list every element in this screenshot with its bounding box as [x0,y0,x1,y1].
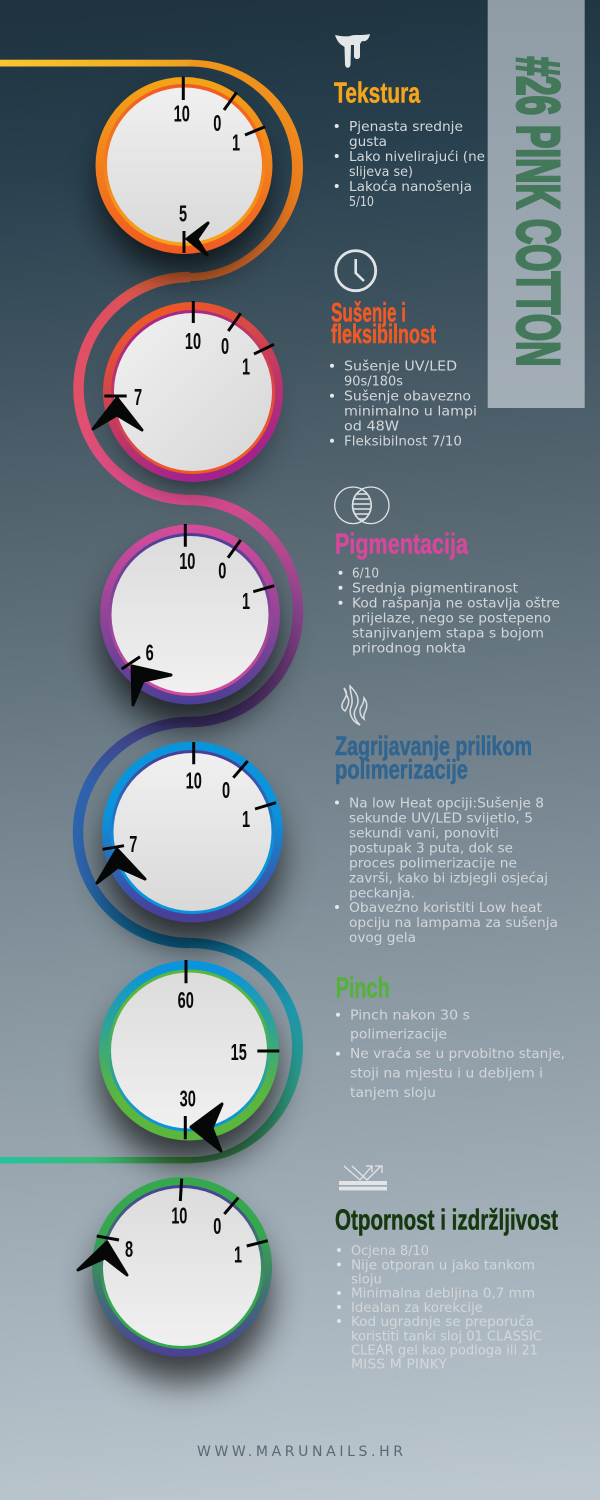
list: prijelaze, nego se postepeno [352,611,551,626]
list: minimalno u lampi [344,405,477,420]
dial 3: pigmentacija 6: 0 [218,558,226,585]
dial 3: pigmentacija 6 [100,524,280,705]
dial 5: pinch 30 [99,960,279,1151]
list: od 48W [344,420,399,435]
list [335,795,558,946]
dial 4: zagrijavanje 7: 1 [242,806,250,833]
list: stoji na mjestu i u debljem i [350,1066,543,1082]
dial 2: susenje 7 [93,301,283,482]
icon: dripping texture [335,34,370,68]
list [335,120,485,210]
list: 6/10 [352,566,379,581]
dial 1: tekstura 5 [96,77,272,255]
list: peckanja. [349,887,415,902]
list: ovog gela [349,931,416,946]
list [336,1008,565,1101]
list: proces polimerizacije ne [349,856,517,872]
list: Obavezno koristiti Low heat [349,901,542,916]
dial 1: tekstura 5: 1 [232,130,240,157]
dial 3: pigmentacija 6: 6 [146,640,154,667]
list: Idealan za korekcije [351,1301,483,1316]
dial 3: pigmentacija 6: 10 [179,549,195,575]
list [330,359,477,450]
pointer [97,849,145,883]
list: 5/10 [349,195,374,210]
list: Na low Heat opciji:Sušenje 8 [349,795,544,811]
list: Sušenje UV/LED [344,359,457,375]
dial 4: zagrijavanje 7: 7 [129,831,137,858]
list: polimerizacije [350,1028,447,1043]
pointer [132,666,171,705]
product title: #26 PINK COTTON [504,56,572,366]
heading: Zagrijavanje prilikom [335,731,532,761]
section: susenje: fleksibilnost [331,319,436,349]
dial 1: tekstura 5: 10 [174,101,190,128]
pointer [78,1242,127,1275]
list: Kod ugradnje se preporuča [351,1314,534,1330]
pointer [191,1104,222,1151]
product title panel [488,0,585,408]
list: Fleksibilnost 7/10 [344,435,462,450]
list: Lakoća nanošenja [349,179,472,195]
list: Minimalna debljina 0,7 mm [351,1287,535,1302]
list: prirodnog nokta [352,641,466,656]
list [337,1244,542,1373]
dial 1: tekstura 5: 0 [213,111,221,137]
list: sekundi vani, ponoviti [349,826,499,841]
list: Lako nivelirajući (ne [349,149,485,165]
list: gusta [349,135,387,150]
list: Ocjena 8/10 [351,1244,429,1259]
heading: Pigmentacija [335,528,469,560]
dial 5: pinch 30: 30 [180,1086,196,1113]
dial 2: susenje 7: 1 [242,354,250,381]
dial 1: tekstura 5: 5 [179,201,187,228]
dial 5: pinch 30: 60 [178,987,194,1014]
list [338,566,560,656]
heading: Sušenje i [331,298,406,328]
list: koristiti tanki sloj 01 CLASSIC [351,1329,542,1344]
dial 4: zagrijavanje 7: 10 [186,768,202,795]
pointer [93,398,142,430]
ribbon connecting the dials [0,60,303,1163]
list: postupak 3 puta, dok se [349,841,513,856]
icon: clock [336,251,376,291]
dial 6: otpornost 8 [78,1177,272,1357]
dial 4: zagrijavanje 7 [97,742,283,922]
list: stanjivanjem stapa s bojom [352,626,544,641]
list: završi, kako bi izbjegli osjećaj [349,870,548,886]
section: zagrijavanje: polimerizacije [335,754,468,784]
heading: Tekstura [334,78,421,110]
icon: heat waves [342,686,367,725]
list: opciju na lampama za sušenja [349,915,558,931]
heading: Pinch [336,972,390,1004]
section: pigmentacija [335,487,560,656]
list: MISS M PINKY [351,1358,448,1373]
list: Nije otporan u jako tankom [351,1258,535,1273]
dial 3: pigmentacija 6: 1 [242,589,250,615]
list: Pjenasta srednje [349,120,463,135]
dial 6: otpornost 8: 0 [213,1214,221,1240]
section: tekstura [334,34,485,210]
dial 5: pinch 30: 15 [231,1040,247,1066]
icon: overlapping circles [335,487,389,524]
list: Kod rašpanja ne ostavlja oštre [352,595,560,611]
dial 4: zagrijavanje 7: 0 [222,777,230,804]
list: slijeva se) [349,165,413,180]
list: Pinch nakon 30 s [350,1008,470,1023]
dial shadows [94,106,280,1382]
dial 2: susenje 7: 0 [221,334,229,360]
list: tanjem sloju [350,1086,436,1101]
list: sekunde UV/LED svijetlo, 5 [349,811,533,826]
list: sloju [351,1272,382,1288]
dial 2: susenje 7: 7 [134,385,142,411]
list: Sušenje obavezno [344,389,471,405]
section: pinch [336,972,565,1101]
list: CLEAR gel kao podloga ili 21 [351,1344,538,1358]
dial 2: susenje 7: 10 [185,329,201,355]
dial 6: otpornost 8: 8 [125,1236,133,1263]
list: 90s/180s [344,375,403,390]
section: otpornost [335,1166,558,1373]
section: zagrijavanje [335,686,558,946]
footer website: WWW.MARUNAILS.HR [197,1444,403,1460]
dial 6: otpornost 8: 1 [234,1242,242,1269]
list: Srednja pigmentiranost [352,581,518,596]
section: susenje [330,251,477,450]
dial 6: otpornost 8: 10 [171,1203,187,1230]
list: Ne vraća se u prvobitno stanje, [350,1046,565,1062]
icon: reflecting surface [339,1166,387,1190]
pointer [187,223,208,255]
